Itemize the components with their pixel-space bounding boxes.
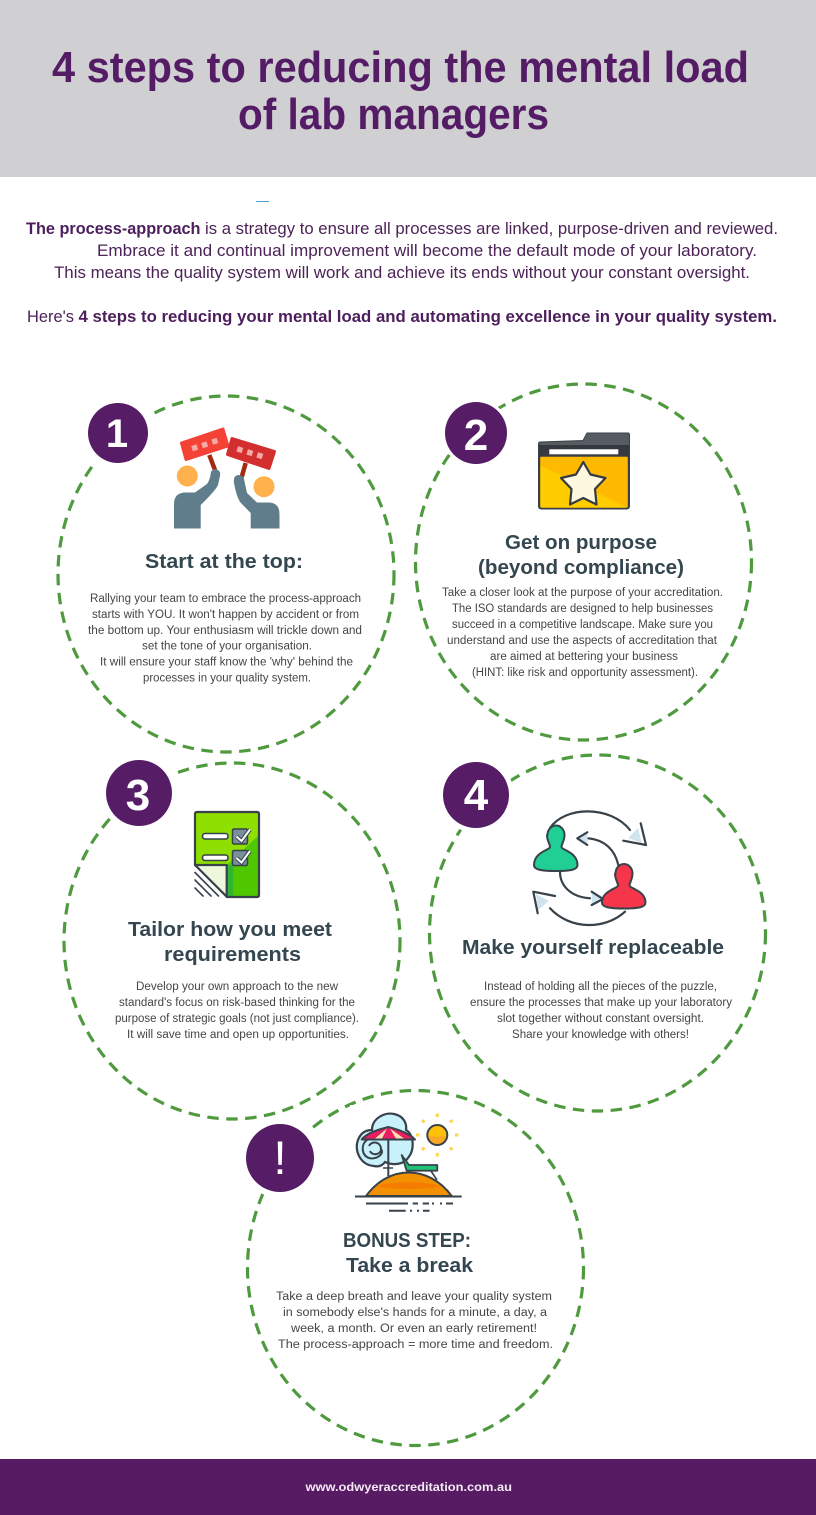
body text: week, a month. Or even an early retirement! <box>290 1323 537 1335</box>
icon: people holding signs <box>174 429 280 528</box>
heading: Take a break <box>346 1254 474 1277</box>
panel: step 2 <box>416 384 752 740</box>
intro text: Here's <box>27 307 74 326</box>
badge: 3: 3 <box>126 771 150 820</box>
heading: BONUS STEP: <box>343 1229 471 1252</box>
panel: bonus step <box>240 1090 584 1446</box>
footer url: www.odwyeraccreditation.com.au <box>304 1480 512 1494</box>
body text <box>115 981 359 1041</box>
body text <box>442 587 723 679</box>
body text: Take a closer look at the purpose of your accreditation. <box>442 587 723 599</box>
body text <box>276 1291 553 1351</box>
intro text: The process-approach <box>26 219 200 238</box>
header band <box>0 0 816 177</box>
panel: step 4 <box>430 755 766 1111</box>
body text: Develop your own approach to the new <box>136 981 339 993</box>
body text: Instead of holding all the pieces of the puzzle, <box>484 981 717 993</box>
heading: Tailor how you meet <box>128 918 332 941</box>
body text: ensure the processes that make up your laboratory <box>470 997 732 1009</box>
badge: 2 <box>445 402 507 464</box>
badge: exclamation: ! <box>273 1131 287 1184</box>
badge: 4: 4 <box>464 771 489 820</box>
body text <box>88 593 362 684</box>
body text: The process-approach = more time and freedom. <box>278 1339 553 1351</box>
body text: slot together without constant oversight. <box>497 1013 704 1025</box>
body text: purpose of strategic goals (not just compliance). <box>115 1013 359 1025</box>
heading: requirements <box>164 943 301 966</box>
heading <box>478 531 684 579</box>
title: 4 steps to reducing the mental load <box>52 43 749 92</box>
heading: Get on purpose <box>505 531 657 554</box>
body text: Share your knowledge with others! <box>512 1029 689 1041</box>
intro text: is a strategy to ensure all processes are linked, purpose-driven and reviewed. <box>205 219 778 238</box>
intro text <box>26 219 778 326</box>
footer band <box>0 1459 816 1515</box>
body text: in somebody else's hands for a minute, a day, a <box>283 1307 548 1319</box>
badge: 2: 2 <box>464 411 488 460</box>
body text: processes in your quality system. <box>143 672 311 684</box>
body text: standard's focus on risk-based thinking for the <box>119 997 355 1009</box>
title: of lab managers <box>238 90 549 139</box>
intro text: Embrace it and continual improvement will become the default mode of your laboratory. <box>97 241 757 260</box>
heading: Make yourself replaceable <box>462 936 724 959</box>
badge: 4 <box>443 762 509 828</box>
body text: succeed in a competitive landscape. Make sure you <box>452 619 713 631</box>
icon: checklist <box>194 812 259 898</box>
body text: are aimed at bettering your business <box>490 651 678 663</box>
icon: beach with umbrella and sun <box>355 1114 462 1211</box>
body text: the bottom up. Your enthusiasm will trickle down and <box>88 625 362 637</box>
heading <box>128 918 332 966</box>
intro text: 4 steps to reducing your mental load and automating excellence in your quality system. <box>78 307 777 326</box>
icon: people exchange arrows <box>533 811 646 925</box>
badge: 1: 1 <box>106 412 128 456</box>
body text: Take a deep breath and leave your quality system <box>276 1291 552 1303</box>
body text <box>470 981 732 1041</box>
panel: step 1 <box>58 396 394 752</box>
body text: Rallying your team to embrace the process-approach <box>90 593 361 605</box>
body text: set the tone of your organisation. <box>142 640 312 652</box>
heading: Start at the top: <box>145 550 303 573</box>
title <box>52 43 749 139</box>
body text: starts with YOU. It won't happen by accident or from <box>92 609 359 621</box>
heading <box>343 1229 474 1277</box>
panel: step 3 <box>64 754 400 1119</box>
intro text: This means the quality system will work and achieve its ends without your constant oversight. <box>54 263 750 282</box>
badge: 1 <box>88 403 148 463</box>
heading: (beyond compliance) <box>478 556 684 579</box>
body text: It will ensure your staff know the 'why' behind the <box>100 656 353 668</box>
badge: 3 <box>106 760 172 826</box>
body text: The ISO standards are designed to help businesses <box>452 603 713 615</box>
badge: exclamation <box>246 1124 314 1192</box>
body text: It will save time and open up opportunities. <box>127 1029 349 1041</box>
body text: (HINT: like risk and opportunity assessment). <box>472 667 698 679</box>
body text: understand and use the aspects of accreditation that <box>447 635 718 647</box>
icon: folder with star <box>538 433 630 509</box>
